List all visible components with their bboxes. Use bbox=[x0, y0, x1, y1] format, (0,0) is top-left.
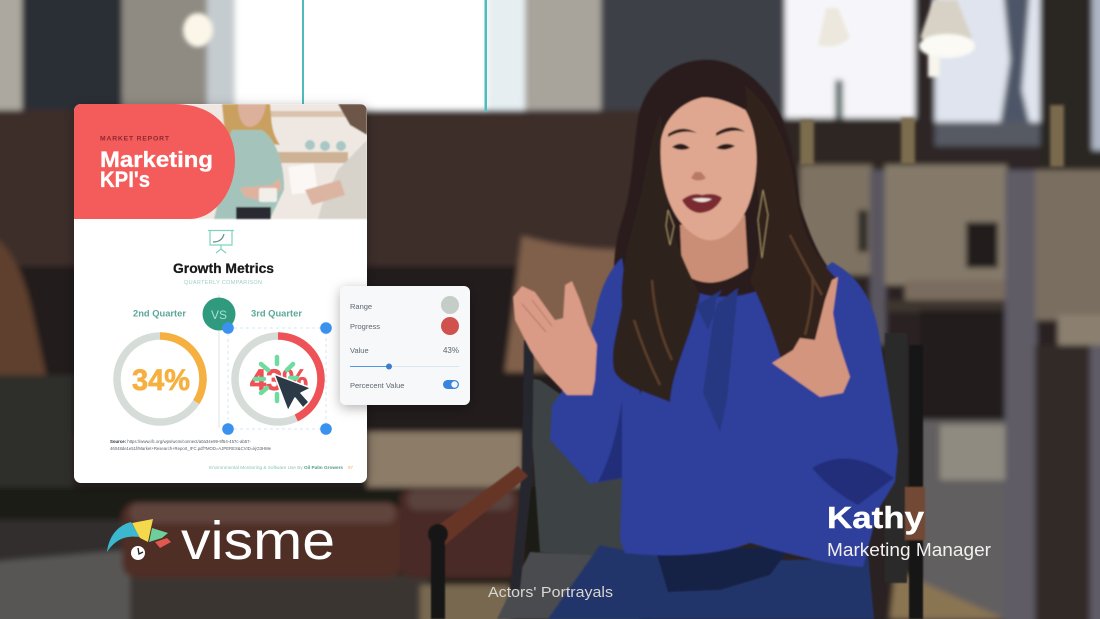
pendant lamps bbox=[818, 0, 975, 77]
bow and tie bbox=[696, 288, 738, 432]
face bbox=[661, 96, 757, 240]
report title: Marketing bbox=[100, 147, 213, 172]
value row: Value bbox=[350, 346, 369, 355]
percent value toggle: Percecent Value bbox=[350, 381, 404, 390]
logo mark bbox=[107, 519, 171, 560]
brass posts bbox=[800, 105, 1064, 167]
value slider bbox=[350, 364, 459, 370]
coral header shape bbox=[74, 104, 235, 219]
icon: cursor arrow bbox=[274, 374, 311, 411]
mouth bbox=[682, 194, 722, 213]
click burst bbox=[255, 357, 297, 401]
blouse bbox=[550, 258, 898, 567]
eyes bbox=[672, 144, 735, 150]
name caption: Kathy bbox=[827, 500, 925, 535]
nose bbox=[691, 172, 706, 180]
donut chart: 3rd quarter 43% bbox=[235, 336, 321, 422]
page number: 97 bbox=[348, 465, 354, 470]
wall light bbox=[183, 13, 213, 47]
earrings bbox=[666, 190, 768, 258]
hair highlights bbox=[634, 235, 822, 385]
name caption: Marketing Manager bbox=[827, 539, 991, 560]
icon: presentation board bbox=[208, 230, 234, 253]
report footer: Environmental Monitoring & Software Use By Oil Palm Growers bbox=[209, 465, 344, 470]
forehead hair bbox=[660, 64, 745, 130]
window mullions bbox=[302, 0, 487, 112]
left hand finger lines bbox=[522, 300, 552, 332]
hair front right bbox=[745, 85, 838, 365]
left hand bbox=[513, 281, 597, 395]
donut chart: 3rd quarter 43%: 43% bbox=[250, 364, 308, 397]
pants bbox=[548, 545, 874, 619]
settings popup panel bbox=[340, 286, 470, 405]
presenter: Kathy bbox=[513, 60, 898, 619]
right hand bbox=[772, 277, 850, 397]
eyebrows bbox=[668, 127, 745, 137]
label: 2nd quarter: 2nd Quarter bbox=[133, 308, 186, 320]
source note: Source: https://www.ifc.org/wps/wcm/connect/a0a34e99-9f54-457c-ab57- bbox=[110, 439, 251, 444]
value row bbox=[350, 346, 459, 355]
disclaimer: Actors' Portrayals bbox=[488, 585, 613, 601]
hair front left bbox=[613, 98, 700, 402]
range row: Range bbox=[350, 302, 372, 311]
report header photo bbox=[190, 104, 367, 219]
name caption bbox=[827, 500, 991, 560]
source note: 46048de1e51f/Market+Research+Report_IFC.pdf?MOD=AJPERES&CVID=kjG3HMe bbox=[110, 446, 272, 451]
sleeve shadows bbox=[598, 400, 894, 505]
neck bbox=[680, 215, 748, 283]
label: 3rd quarter: 3rd Quarter bbox=[251, 308, 302, 320]
report card bbox=[74, 104, 367, 483]
logo wordmark: visme bbox=[181, 511, 335, 571]
visme logo bbox=[107, 511, 335, 571]
report title: KPI's bbox=[100, 167, 150, 192]
value row: 43% bbox=[443, 346, 459, 355]
donut chart: 2nd quarter 34%: 34% bbox=[132, 364, 190, 397]
subheading: QUARTERLY COMPARISON bbox=[184, 280, 262, 286]
hair back bbox=[614, 60, 840, 395]
progress row: Progress bbox=[350, 322, 380, 331]
vs badge bbox=[202, 298, 236, 330]
chair bbox=[428, 333, 925, 619]
vs badge: VS bbox=[211, 308, 227, 322]
donut chart: 2nd quarter 34% bbox=[117, 336, 203, 422]
divider bbox=[218, 295, 220, 428]
waistband shadow bbox=[655, 548, 790, 592]
market report label: MARKET REPORT bbox=[100, 136, 170, 142]
heading: growth metrics: Growth Metrics bbox=[173, 261, 274, 276]
selection box with handles bbox=[222, 322, 332, 435]
